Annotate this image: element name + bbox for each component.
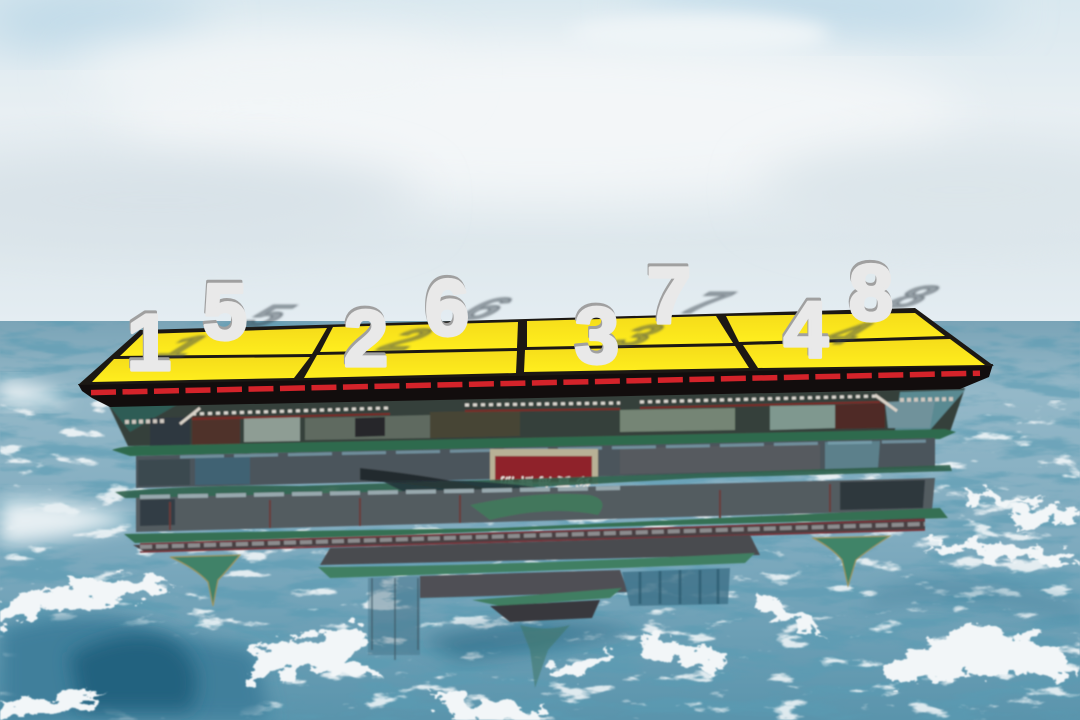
number shadows: 1 [140, 330, 226, 364]
number 6: 6 [424, 260, 468, 349]
sky with clouds [0, 0, 1080, 322]
numbered callouts [126, 245, 956, 387]
number 3: 3 [574, 288, 618, 377]
number shadows: 4 [803, 317, 889, 351]
number shadows: 2 [363, 323, 449, 357]
green roof 3 [124, 508, 948, 543]
green roof 1 [112, 429, 956, 456]
number 8: 8 [848, 245, 892, 334]
number shadows: 3 [595, 319, 681, 353]
deck frame [78, 308, 994, 385]
number 5: 5 [203, 267, 247, 356]
green roof 2 [115, 465, 952, 498]
number 5: 5 [202, 264, 246, 353]
building level 3 [136, 478, 935, 532]
sinking building, upside down [108, 388, 965, 688]
restaurant sign [490, 449, 598, 492]
building level 1 [108, 388, 965, 446]
number 4: 4 [783, 282, 828, 371]
number shadows: 6 [443, 292, 529, 326]
bracket ornament rows [125, 395, 955, 424]
yellow panels [92, 313, 985, 382]
number 1: 1 [126, 295, 170, 384]
number 6: 6 [425, 263, 469, 352]
number 7: 7 [647, 251, 691, 340]
lower block [318, 535, 760, 688]
number shadows: 5 [225, 299, 311, 333]
roof deck with yellow panels [78, 308, 994, 407]
right pavilion [813, 536, 890, 586]
number 2: 2 [344, 294, 388, 383]
number 8: 8 [849, 248, 893, 337]
left pavilion [170, 555, 240, 606]
number shadows: 8 [870, 280, 956, 314]
railing [133, 518, 925, 552]
sea with waves and foam [0, 321, 1080, 720]
building level 2 [136, 438, 935, 498]
number shadows: 7 [663, 286, 749, 320]
deck underside and red band [78, 364, 993, 407]
number 1: 1 [127, 298, 171, 387]
restaurant sign: 珍寶海鮮舫 [495, 474, 591, 492]
number 3: 3 [575, 291, 619, 380]
number 4: 4 [784, 285, 829, 374]
number shadows [140, 280, 956, 364]
number 7: 7 [646, 248, 690, 337]
number 2: 2 [343, 291, 387, 380]
